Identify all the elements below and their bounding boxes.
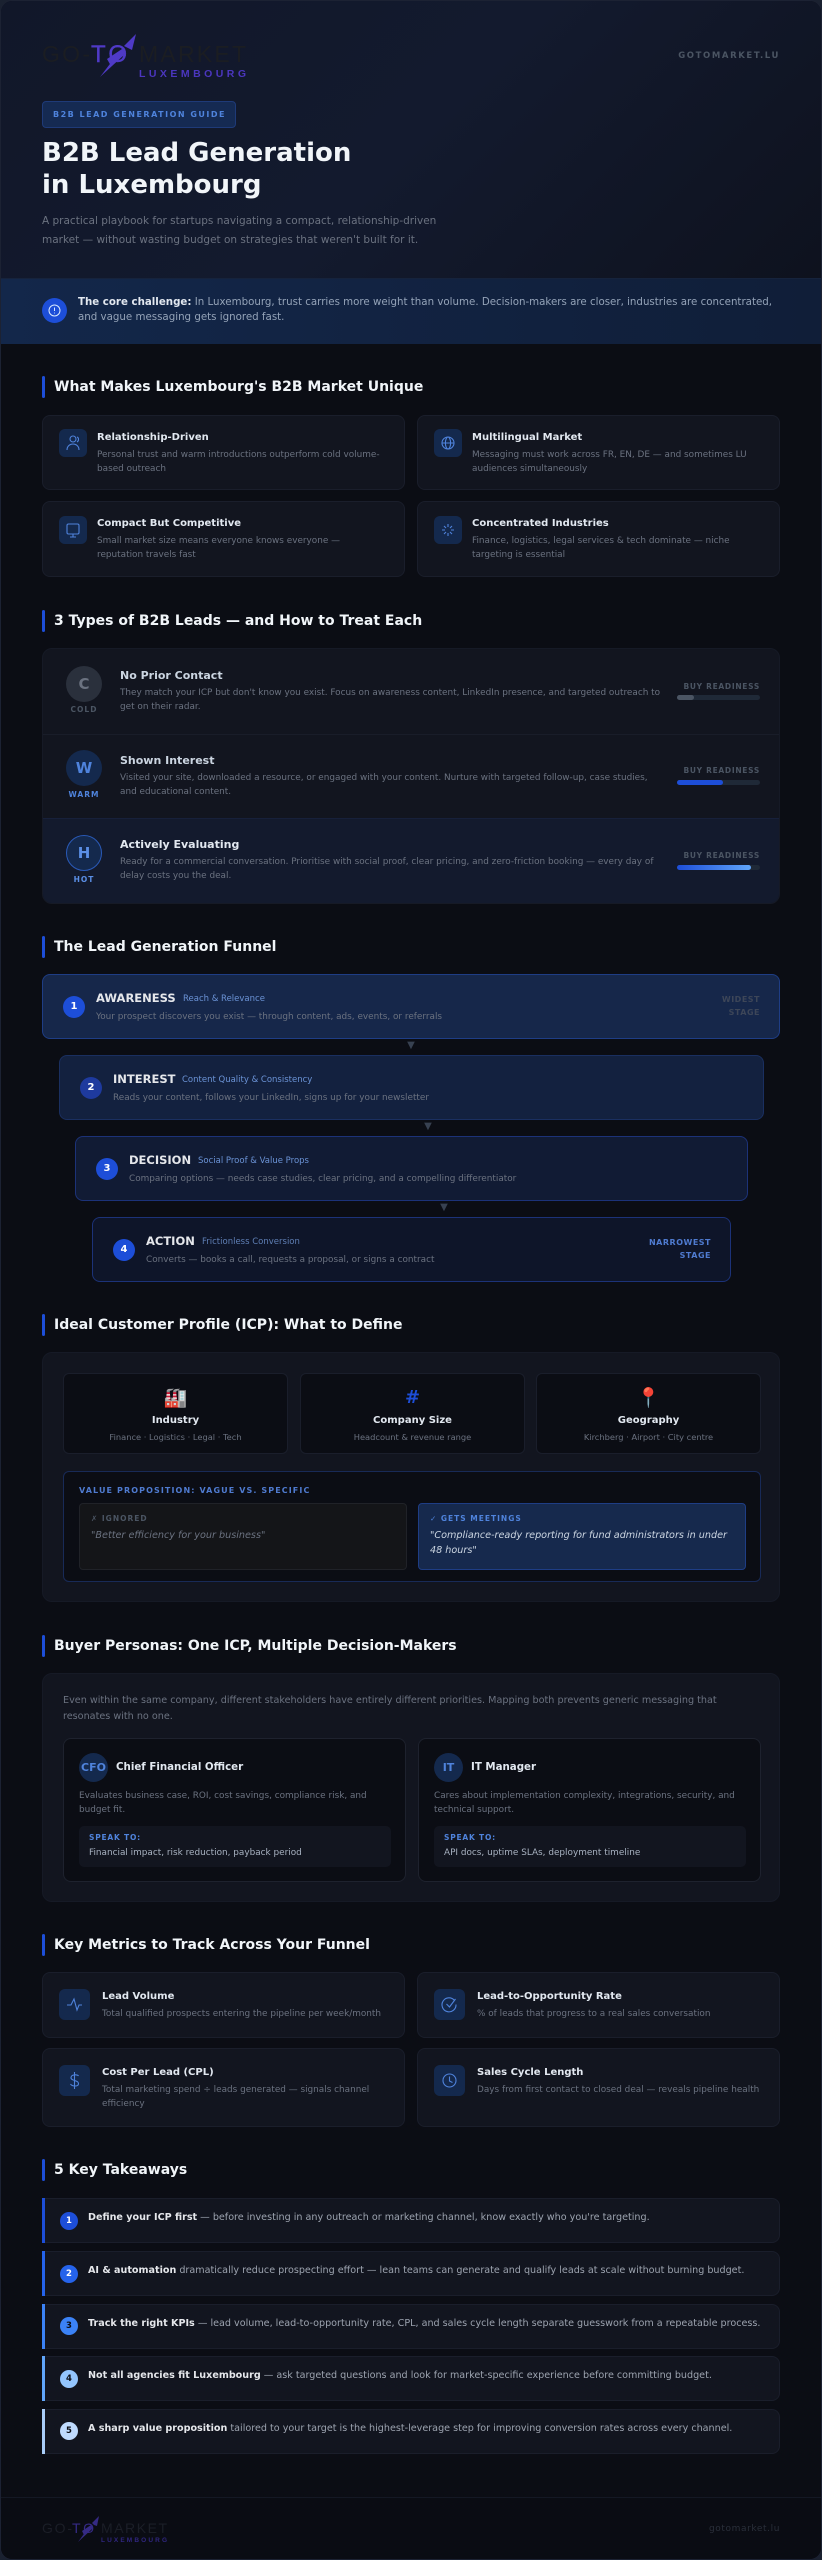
title: Relationship-Driven [97, 432, 209, 443]
number 3: 3 [66, 2321, 72, 2331]
number 1: 1 [66, 2216, 72, 2226]
text: Comparing options — needs case studies, clear pricing, and a compelling differentiator [129, 1174, 516, 1184]
badge: warm: W [76, 759, 92, 777]
heading: takeaways: 5 Key Takeaways [54, 2162, 187, 2178]
number 3 [60, 2317, 78, 2335]
hero header [0, 0, 822, 278]
text: cold [120, 688, 660, 712]
badge: cold: C [78, 675, 90, 693]
label: ✓ GETS MEETINGS [430, 1514, 522, 1523]
text: hot: Ready for a commercial conversation. Prioritise with social proof, clear pricing, and zero-friction booking — every day of [120, 857, 653, 867]
number [63, 996, 85, 1018]
metric: sales cycle [417, 2048, 780, 2127]
heading: metrics: Key Metrics to Track Across Your Funnel [54, 1937, 370, 1953]
text: Total qualified prospects entering the pipeline per week/month [102, 2009, 381, 2019]
text [102, 2085, 369, 2109]
title: Geography [618, 1415, 679, 1426]
text: Finance · Logistics · Legal · Tech [109, 1432, 242, 1442]
number 1 [60, 2212, 78, 2230]
icon: monitor [59, 516, 87, 544]
text: Converts — books a call, requests a proposal, or signs a contract [146, 1255, 434, 1265]
quote: 48 hours" [430, 1544, 477, 1556]
stage 3: decision [75, 1136, 748, 1201]
icon: activity [59, 1989, 90, 2020]
site url: GOTOMARKET.LU [678, 51, 780, 61]
label: hot: HOT [74, 875, 94, 884]
icon: globe [434, 429, 462, 457]
persona: IT manager [418, 1738, 761, 1882]
label: SPEAK TO: [89, 1833, 141, 1842]
focus: Content Quality & Consistency [182, 1075, 312, 1085]
text: Your prospect discovers you exist — through content, ads, events, or referrals [96, 1012, 442, 1022]
title: Lead Volume [102, 1991, 174, 2002]
intro text: resonates with no one. [63, 1711, 173, 1722]
title: Cost Per Lead (CPL) [102, 2067, 214, 2078]
section heading bar [42, 1314, 45, 1336]
text 2: AI & automation dramatically reduce prospecting effort — lean teams can generate and qualify leads at scale without burning budget. [88, 2265, 744, 2276]
logo: TO [91, 41, 127, 68]
text: Reads your content, follows your LinkedIn, signs up for your newsletter [113, 1093, 429, 1103]
panel: ICP [42, 1352, 780, 1602]
readiness label: BUY READINESS [683, 766, 760, 775]
card: industries [417, 501, 780, 577]
title [42, 138, 351, 200]
arrow: ▼ [440, 1202, 448, 1213]
number: 1 [71, 1001, 77, 1012]
number 5 [60, 2422, 78, 2440]
text 1: Define your ICP first — before investing in any outreach or marketing channel, know exactly who you're targeting. [88, 2212, 650, 2223]
number [80, 1077, 102, 1099]
focus: Social Proof & Value Props [198, 1156, 309, 1166]
title: Concentrated Industries [472, 518, 609, 529]
text: budget fit. [79, 1805, 125, 1815]
text: warm: and educational content. [120, 787, 231, 797]
title: Lead-to-Opportunity Rate [477, 1991, 622, 2002]
panel: personas [42, 1673, 780, 1902]
logo: GO- [42, 41, 90, 67]
speak-to box [434, 1826, 746, 1867]
text [97, 450, 380, 474]
stage 4: action [92, 1217, 731, 1282]
quote: "Compliance-ready reporting for fund administrators in under [430, 1530, 727, 1541]
avatar: IT [443, 1761, 454, 1774]
note: NARROWEST [649, 1238, 711, 1247]
text 4: Not all agencies fit Luxembourg — ask targeted questions and look for market-specific experience before committing budget. [88, 2370, 712, 2381]
specific example [418, 1503, 746, 1570]
number: 4 [121, 1244, 127, 1255]
footer logo: TO [72, 2520, 94, 2536]
footer logo: GO- [42, 2520, 72, 2536]
text: Total marketing spend ÷ leads generated — signals channel [102, 2085, 369, 2095]
text: Finance, logistics, legal services & tech dominate — niche [472, 536, 730, 546]
number 5: 5 [66, 2426, 72, 2436]
subtitle [42, 215, 436, 246]
intro text: Even within the same company, different stakeholders have entirely different priorities. Mapping both prevents generic messaging that [63, 1695, 717, 1706]
text: Messaging must work across FR, EN, DE — and sometimes LU [472, 450, 747, 460]
label: cold: COLD [71, 705, 97, 714]
metric: CPL [42, 2048, 405, 2127]
label: VALUE PROPOSITION: VAGUE VS. SPECIFIC [79, 1486, 310, 1495]
footer logo: MARKET [101, 2520, 167, 2536]
focus: Frictionless Conversion [202, 1237, 300, 1247]
card: compact [42, 501, 405, 577]
arrow: ▼ [407, 1040, 415, 1051]
section heading bar [42, 936, 45, 958]
name: IT Manager [471, 1761, 536, 1773]
text: reputation travels fast [97, 550, 196, 560]
avatar [434, 1753, 463, 1782]
icon: loader [434, 516, 462, 544]
readiness bar: cold [677, 695, 760, 700]
text: Days from first contact to closed deal — reveals pipeline health [477, 2085, 759, 2095]
number: 3 [104, 1163, 110, 1174]
badge: warm [66, 750, 102, 786]
icon: pin: 📍 [637, 1387, 660, 1409]
title: Compact But Competitive [97, 518, 241, 529]
badge: hot: H [78, 844, 90, 862]
title: Multilingual Market [472, 432, 582, 443]
label: SPEAK TO: [444, 1833, 496, 1842]
challenge text: and vague messaging gets ignored fast. [78, 311, 284, 323]
takeaway 3 [42, 2304, 780, 2349]
card: company size [300, 1373, 525, 1454]
text: warm [120, 773, 648, 797]
note [649, 1238, 711, 1260]
title: Sales Cycle Length [477, 2067, 583, 2078]
title: warm: Shown Interest [120, 754, 214, 767]
persona: CFO [63, 1738, 406, 1882]
logo: LUXEMBOURG [139, 68, 246, 80]
section heading bar [42, 610, 45, 632]
text [79, 1791, 367, 1815]
text: Personal trust and warm introductions outperform cold volume- [97, 450, 380, 460]
readiness label: BUY READINESS [683, 682, 760, 691]
heading: ICP: Ideal Customer Profile (ICP): What to Define [54, 1317, 402, 1333]
value proposition box [63, 1471, 761, 1582]
text: audiences simultaneously [472, 464, 587, 474]
icon: factory: 🏭 [164, 1387, 187, 1409]
metric: lead volume [42, 1972, 405, 2038]
footer logo [42, 2516, 167, 2544]
text 5: A sharp value proposition tailored to your target is the highest-leverage step for improving conversion rates across every channel. [88, 2423, 732, 2434]
number 4: 4 [66, 2374, 72, 2384]
footer logo: LUXEMBOURG [101, 2537, 167, 2544]
title: in Luxembourg [42, 170, 261, 200]
label: ✗ IGNORED [91, 1514, 148, 1523]
takeaway 5 [42, 2409, 780, 2454]
badge: B2B LEAD GENERATION GUIDE [53, 110, 226, 119]
text: hot [120, 857, 654, 881]
speak-to box [79, 1826, 391, 1867]
logo: MARKET [139, 41, 246, 67]
readiness label: BUY READINESS [683, 851, 760, 860]
readiness bar: warm [677, 780, 760, 785]
subtitle: market — without wasting budget on strategies that weren't built for it. [42, 234, 418, 246]
note: STAGE [680, 1250, 711, 1260]
note [722, 995, 760, 1016]
challenge text [78, 296, 772, 323]
heading: funnel: The Lead Generation Funnel [54, 939, 276, 955]
vague example [79, 1503, 407, 1570]
text: cold: They match your ICP but don't know you exist. Focus on awareness content, LinkedIn presence, and targeted outreach to [120, 688, 660, 698]
text: Kirchberg · Airport · City centre [584, 1432, 713, 1442]
text: % of leads that progress to a real sales conversation [477, 2009, 710, 2019]
subtitle: A practical playbook for startups navigating a compact, relationship-driven [42, 215, 436, 227]
label: warm: WARM [68, 790, 99, 799]
text [472, 450, 747, 474]
text: efficiency [102, 2099, 145, 2109]
heading: market unique: What Makes Luxembourg's B2B Market Unique [54, 379, 423, 395]
title: Industry [152, 1415, 199, 1426]
text: targeting is essential [472, 550, 565, 560]
title: B2B Lead Generation [42, 138, 351, 168]
text: cold: get on their radar. [120, 702, 201, 712]
title: Company Size [373, 1415, 452, 1426]
avatar [79, 1753, 108, 1782]
name: Chief Financial Officer [116, 1761, 243, 1773]
heading: personas: Buyer Personas: One ICP, Multiple Decision-Makers [54, 1638, 457, 1654]
text: Financial impact, risk reduction, payback period [89, 1848, 302, 1858]
card: geography [536, 1373, 761, 1454]
text: API docs, uptime SLAs, deployment timeline [444, 1848, 640, 1858]
name: DECISION [129, 1153, 191, 1167]
title: cold: No Prior Contact [120, 669, 223, 682]
heading: lead types: 3 Types of B2B Leads — and How to Treat Each [54, 613, 422, 629]
text: based outreach [97, 464, 166, 474]
text: Cares about implementation complexity, integrations, security, and [434, 1791, 735, 1801]
text: warm: Visited your site, downloaded a resource, or engaged with your content. Nurture with targeted follow-up, case studies, [120, 773, 648, 783]
stage 2: interest [59, 1055, 764, 1120]
takeaway 2 [42, 2251, 780, 2296]
text [97, 536, 340, 560]
text: Headcount & revenue range [354, 1432, 471, 1442]
text: technical support. [434, 1805, 514, 1815]
icon: people [59, 429, 87, 457]
number: 2 [88, 1082, 94, 1093]
readiness bar: hot [677, 865, 760, 870]
icon: hash: # [405, 1387, 420, 1408]
quote [430, 1530, 728, 1556]
avatar: CFO [81, 1761, 106, 1774]
number 2: 2 [66, 2269, 72, 2279]
section heading bar [42, 2159, 45, 2181]
core challenge band [0, 278, 822, 344]
takeaway 4 [42, 2356, 780, 2401]
divider [43, 734, 781, 735]
quote: "Better efficiency for your business" [91, 1530, 265, 1541]
section heading bar [42, 376, 45, 398]
badge [42, 101, 236, 128]
section heading bar [42, 1934, 45, 1956]
focus: Reach & Relevance [183, 994, 265, 1004]
card: industry [63, 1373, 288, 1454]
text: Small market size means everyone knows everyone — [97, 536, 340, 546]
intro text [63, 1695, 717, 1722]
footer [0, 2497, 822, 2560]
name: AWARENESS [96, 991, 176, 1005]
number [113, 1239, 135, 1261]
number [96, 1158, 118, 1180]
text: Evaluates business case, ROI, cost savings, compliance risk, and [79, 1791, 367, 1801]
takeaway 1 [42, 2198, 780, 2243]
stage 1: awareness [42, 974, 780, 1039]
alert icon [42, 298, 67, 323]
card: relationship-driven [42, 415, 405, 490]
icon: clock [434, 2065, 465, 2096]
challenge text: The core challenge: In Luxembourg, trust carries more weight than volume. Decision-makers are closer, industries are concentrated, [78, 296, 772, 308]
text: hot: delay costs you the deal. [120, 871, 231, 881]
section heading bar [42, 1635, 45, 1657]
panel: lead types [42, 648, 780, 904]
note: STAGE [729, 1008, 760, 1016]
text 3: Track the right KPIs — lead volume, lead-to-opportunity rate, CPL, and sales cycle length separate guesswork from a repeatable process. [88, 2318, 760, 2329]
title: hot: Actively Evaluating [120, 838, 239, 851]
icon: dollar [59, 2065, 90, 2096]
logo [42, 34, 246, 80]
metric: lead-to-opportunity [417, 1972, 780, 2038]
hot row background [43, 818, 781, 905]
name: INTEREST [113, 1072, 175, 1086]
note: WIDEST [722, 995, 760, 1004]
card: multilingual [417, 415, 780, 490]
name: ACTION [146, 1234, 195, 1248]
number 4 [60, 2370, 78, 2388]
number 2 [60, 2265, 78, 2283]
text [434, 1791, 735, 1815]
icon: check circle [434, 1989, 465, 2020]
arrow: ▼ [424, 1121, 432, 1132]
badge: cold [66, 666, 102, 702]
text [472, 536, 730, 560]
badge: hot [66, 835, 102, 871]
footer url: gotomarket.lu [709, 2524, 780, 2534]
